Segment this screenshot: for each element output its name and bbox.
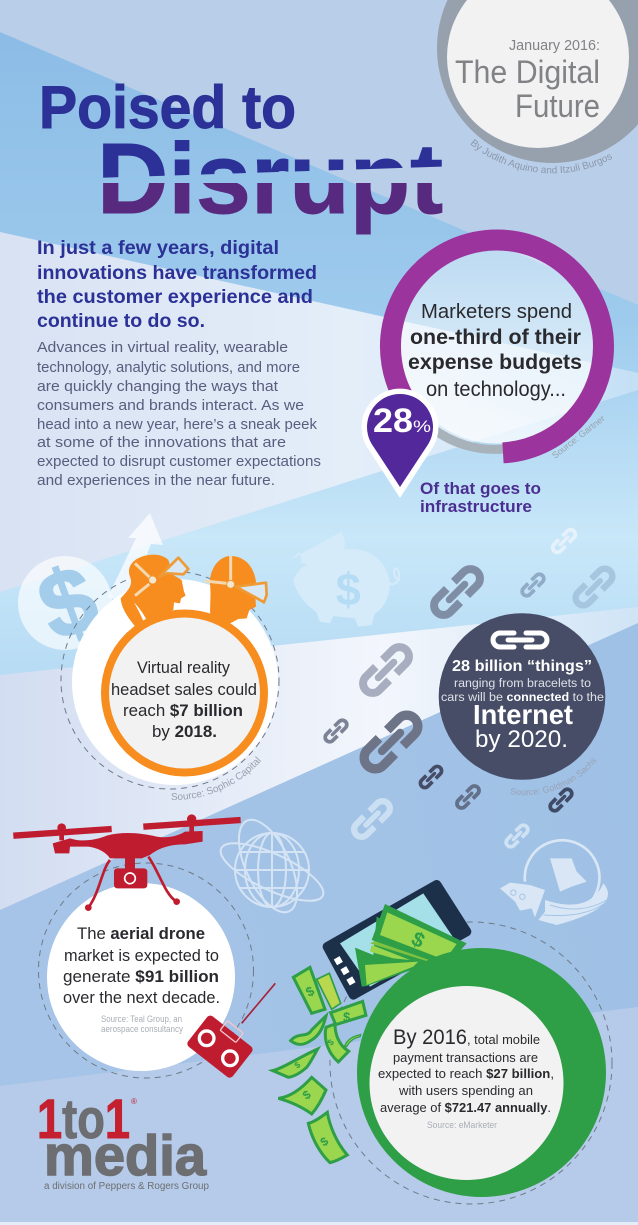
background icon: piggy bank: $ [336, 564, 361, 615]
drone text: over the next decade. [63, 989, 220, 1007]
flying dollar bills: $ [303, 983, 317, 1000]
intro heading: continue to do so. [37, 311, 205, 332]
dashed orbit [38, 863, 254, 1078]
icon: smartphone with cash: $ [408, 927, 429, 953]
intro body: are quickly changing the ways that [37, 378, 279, 395]
flying dollar bills: $ [325, 1037, 336, 1048]
payments text: average of $721.47 annually. [380, 1100, 551, 1115]
badge title: Future [515, 88, 600, 124]
connected things text: by 2020. [475, 726, 568, 753]
issue badge [437, 0, 638, 163]
flying dollar bills: $ [300, 1087, 314, 1103]
grey remainder arc [432, 428, 504, 449]
intro body: consumers and brands interact. As we [37, 397, 304, 414]
intro heading: innovations have transformed [37, 263, 317, 284]
title: Poised to [39, 74, 296, 141]
VR text: Virtual reality [137, 658, 231, 677]
logo wordmark 1to1: 1to1 [37, 1087, 130, 1150]
payments text: expected to reach $27 billion, [378, 1066, 554, 1081]
VR text: by 2018. [152, 722, 217, 741]
payments text: By 2016 [393, 1026, 467, 1049]
icon: VR headset heads [121, 555, 267, 628]
VR text: headset sales could [111, 680, 257, 699]
panel: marketers budget ring [362, 240, 607, 516]
logo wordmark media: media [44, 1124, 207, 1188]
ring text: on technology... [426, 378, 566, 401]
title: Disrupt [97, 123, 443, 235]
connected things text: Internet [473, 699, 573, 730]
source: eMarketer: Source: eMarketer [427, 1120, 497, 1130]
intro body [37, 339, 321, 489]
background icon: wireframe globe [214, 811, 330, 921]
badge title: The Digital [455, 54, 600, 90]
flying dollar bills: $ [292, 1059, 303, 1070]
dashed orbit [61, 571, 279, 789]
map pin 28%: % [413, 417, 431, 436]
source: Sophic Capital [171, 750, 270, 800]
intro body: at some of the innovations that are [37, 434, 286, 451]
intro heading [37, 238, 317, 332]
icon: white chain [493, 633, 547, 647]
flying dollar bills: $ [318, 1134, 331, 1149]
source: Teal Group: Source: Teal Group, an [101, 1014, 182, 1024]
icon: drone [13, 814, 241, 911]
badge title [455, 54, 600, 124]
map pin 28%: 28 [373, 402, 413, 440]
source: Teal Group [101, 1014, 183, 1034]
orange ring [105, 614, 264, 772]
source: Teal Group: aerospace consultancy [101, 1024, 183, 1034]
VR text [111, 658, 257, 741]
infrastructure note: Of that goes to [420, 479, 541, 498]
logo: 1to1 media: ® [131, 1097, 137, 1106]
payments text: payment transactions are [393, 1050, 538, 1065]
icon: drone remote control [186, 983, 275, 1079]
drone text: generate $91 billion [63, 968, 219, 986]
payments text: with users spending an [398, 1083, 533, 1098]
ring text: expense budgets [408, 350, 582, 374]
green ring [357, 948, 606, 1197]
intro body: head into a new year, here’s a sneak peek [37, 416, 317, 433]
purple ring arc [390, 240, 603, 453]
connected things text: cars will be connected to the [441, 690, 604, 704]
title [39, 74, 443, 235]
connected things text: 28 billion “things” [452, 658, 592, 675]
dashed orbit [330, 922, 612, 1204]
panel: aerial drone [13, 814, 275, 1079]
logo tagline: a division of Peppers & Rogers Group [44, 1181, 209, 1192]
icon: smartphone with cash [327, 885, 467, 995]
chain links [323, 528, 615, 849]
background icon: dollar coin and arrow [18, 513, 163, 661]
drone text: The aerial drone [77, 925, 205, 943]
panel: mobile payments [273, 885, 612, 1204]
byline: By Judith Aquino and Itzuli Burgos [470, 139, 612, 174]
VR text: reach $7 billion [123, 701, 243, 720]
intro body: Advances in virtual reality, wearable [37, 339, 288, 356]
intro heading: the customer experience and [37, 287, 313, 308]
flying dollar bills: $ [343, 1010, 350, 1024]
panel: connected things: Source: Goldman Sachs [510, 758, 596, 796]
drone text [63, 925, 220, 1007]
intro body: expected to disrupt customer expectations [37, 453, 321, 470]
drone text: market is expected to [64, 947, 219, 965]
background icon: rocket and globe [500, 840, 608, 925]
panel: connected things [438, 613, 606, 796]
logo: 1to1 media [37, 1087, 209, 1192]
ring text [408, 300, 582, 401]
source: Gartner: Source: Gartner [550, 413, 607, 461]
panel: virtual reality: Source: Sophic Capital [172, 756, 261, 800]
payments text: , total mobile [467, 1032, 540, 1047]
map pin 28% [362, 389, 438, 498]
badge date: January 2016: [509, 38, 600, 54]
source: Goldman Sachs [510, 738, 610, 795]
flying dollar bills [273, 967, 366, 1163]
connected things text: ranging from bracelets to [454, 676, 591, 690]
connected things text [441, 658, 604, 753]
background icon: dollar coin and arrow: $ [25, 544, 110, 661]
intro body: and experiences in the near future. [37, 472, 275, 489]
ring text: Marketers spend [421, 300, 572, 323]
infrastructure note: infrastructure [420, 497, 532, 516]
intro heading: In just a few years, digital [37, 238, 279, 259]
intro body: technology, analytic solutions, and more [37, 359, 300, 376]
background icon: piggy bank [290, 532, 400, 627]
infrastructure note [420, 479, 541, 516]
panel: virtual reality [60, 554, 280, 800]
ring text: one-third of their [410, 325, 581, 349]
payments text [378, 1026, 554, 1115]
